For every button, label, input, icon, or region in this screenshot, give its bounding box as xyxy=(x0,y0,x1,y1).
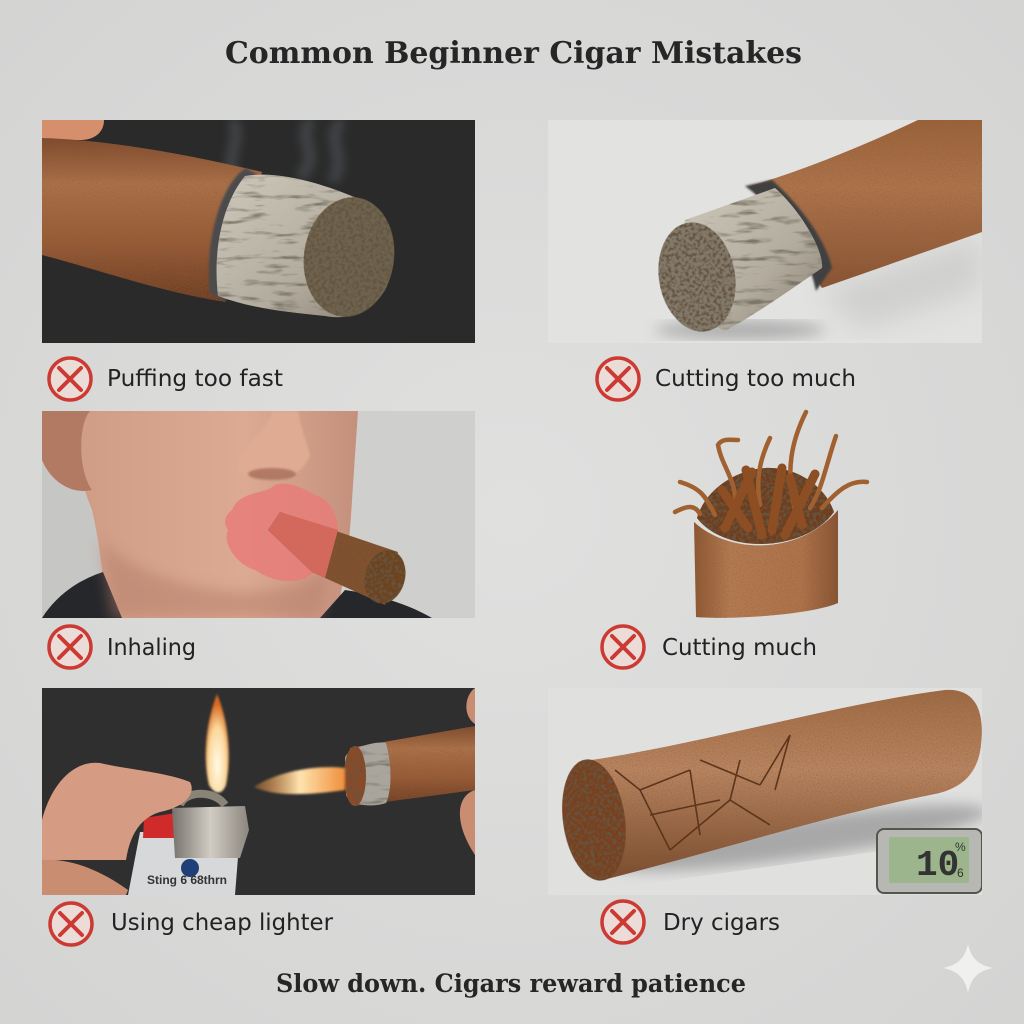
mistake label: inhaling: Inhaling xyxy=(107,633,196,661)
footer tagline: Slow down. Cigars reward patience xyxy=(276,969,746,998)
mistake label: cutting too much xyxy=(597,358,856,400)
mistake label: using cheap lighter: Using cheap lighter xyxy=(111,908,333,936)
panel: cut tobacco photo xyxy=(675,412,867,618)
panel: dry cigar photo: 10 xyxy=(916,845,959,886)
panel: dry cigar photo: 6 xyxy=(957,866,964,880)
mistake label: dry cigars: Dry cigars xyxy=(663,908,780,936)
panel: inhaling photo xyxy=(42,411,475,618)
panel: dry cigar photo: % xyxy=(955,840,966,854)
mistake label: cutting too much: Cutting too much xyxy=(655,364,856,392)
panel: dry cigar photo xyxy=(548,688,991,895)
panel: cheap lighter photo: Sting 6 68thrn xyxy=(147,873,227,887)
mistake label: cutting much xyxy=(602,626,817,668)
panel: cutting too much photo xyxy=(548,120,982,343)
icon: sparkle xyxy=(943,944,993,993)
mistake label: puffing too fast xyxy=(49,358,283,400)
mistake label: puffing too fast: Puffing too fast xyxy=(107,364,283,392)
mistake label: cutting much: Cutting much xyxy=(662,633,817,661)
panel: puffing too fast photo xyxy=(42,120,475,343)
mistake label: dry cigars xyxy=(602,901,780,943)
title: Common Beginner Cigar Mistakes xyxy=(225,36,802,71)
panel: cheap lighter photo xyxy=(42,688,475,895)
mistake label: inhaling xyxy=(49,626,196,668)
mistake label: using cheap lighter xyxy=(50,903,333,945)
